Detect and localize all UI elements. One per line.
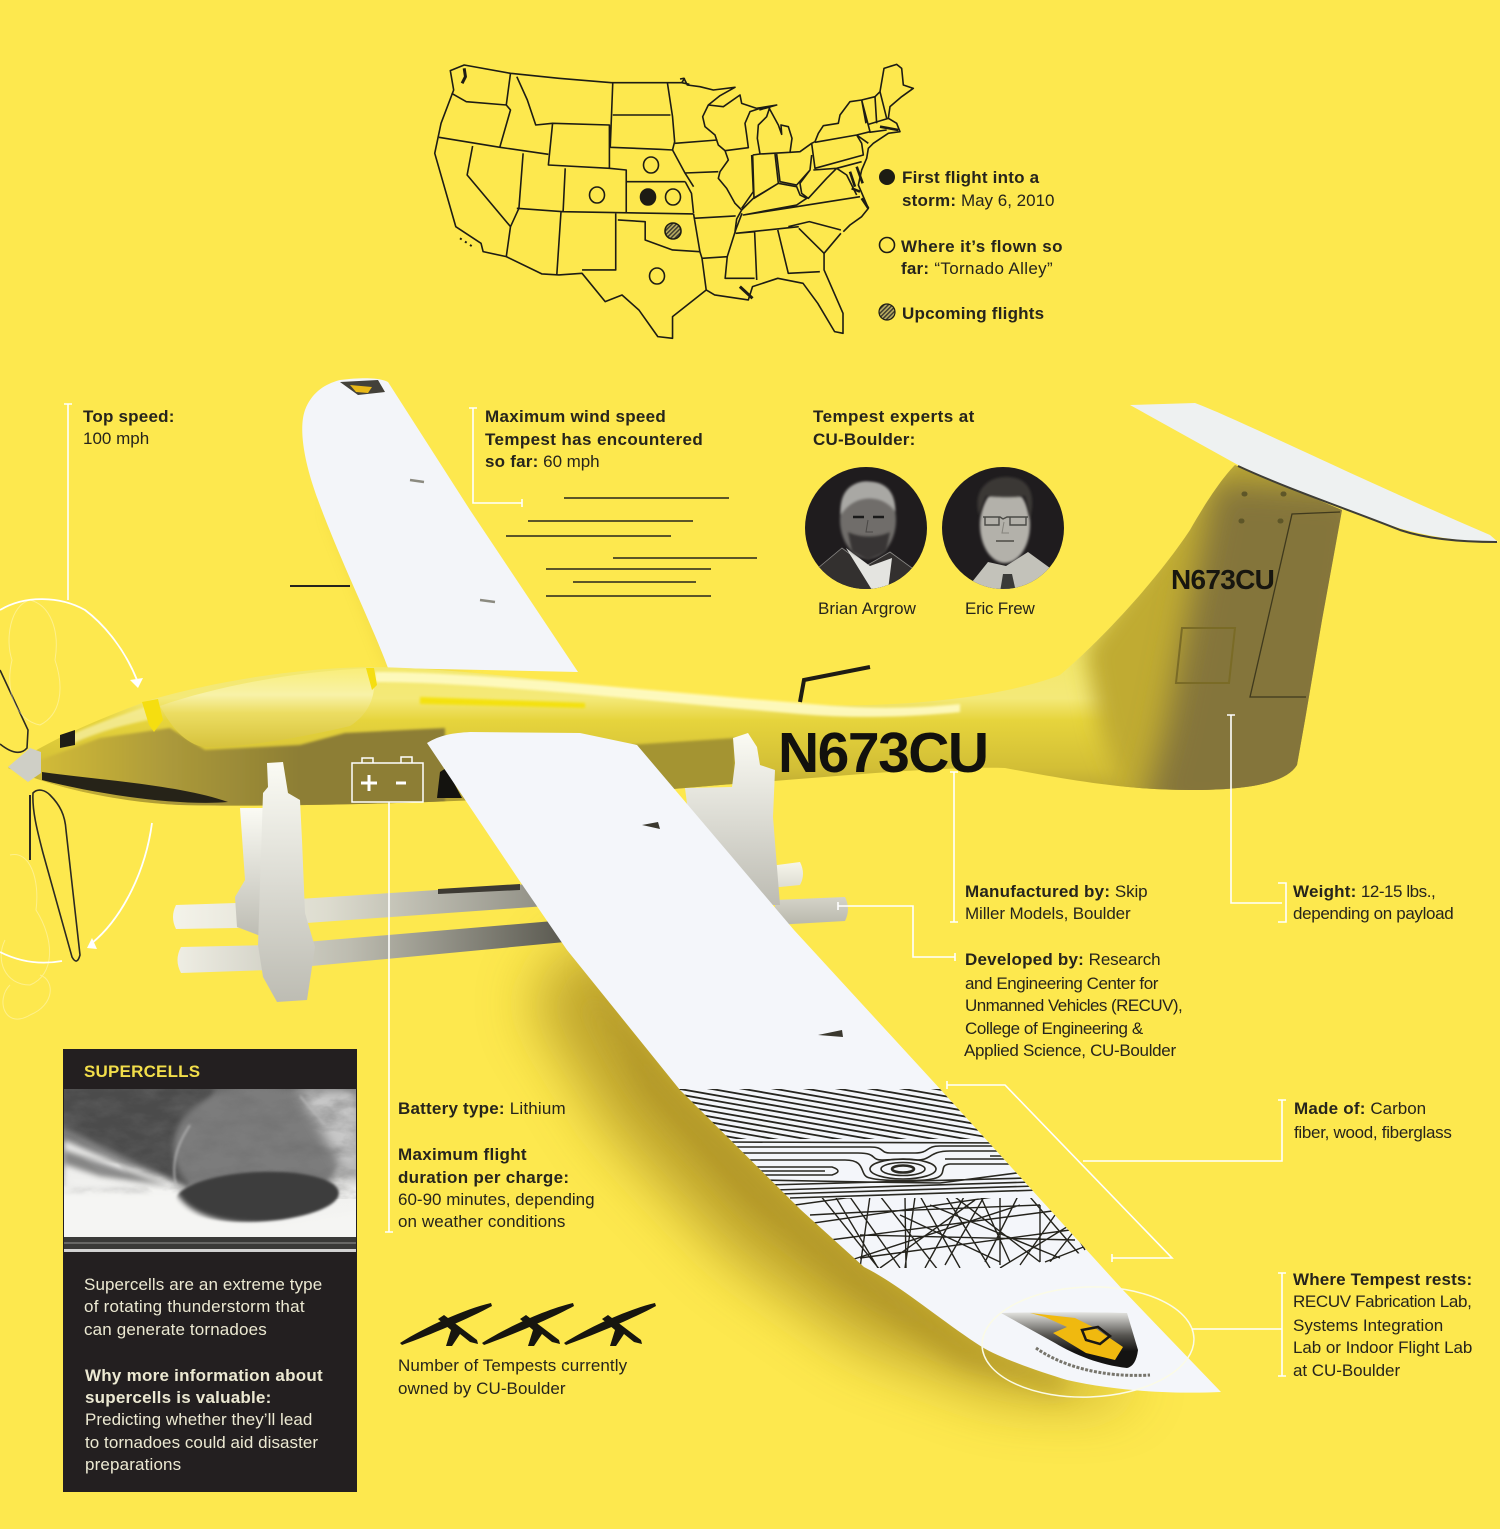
supercell photo bbox=[60, 1085, 360, 1252]
wing hinge marks bbox=[642, 822, 843, 1037]
callout: developed by: Applied Science, CU-Boulder bbox=[964, 1041, 1176, 1060]
wood grain bbox=[725, 1142, 1040, 1198]
wing shadows bbox=[330, 500, 1140, 1400]
supercells description: preparations bbox=[85, 1455, 181, 1474]
callout: developed by: College of Engineering & bbox=[965, 1019, 1144, 1038]
portrait: Eric Frew bbox=[942, 467, 1064, 600]
experts heading: Tempest experts at bbox=[813, 407, 975, 426]
propeller bbox=[0, 670, 80, 961]
callout: manufactured by: Manufactured by: Skip bbox=[965, 882, 1148, 901]
map of the United States bbox=[435, 64, 913, 338]
expert names: Brian Argrow bbox=[818, 599, 917, 618]
fin body colour bbox=[1076, 465, 1342, 790]
callout: top speed: 100 mph bbox=[83, 429, 149, 448]
callout: weight: depending on payload bbox=[1293, 904, 1453, 923]
expert names: Eric Frew bbox=[965, 599, 1036, 618]
nose highlight bbox=[70, 705, 158, 745]
callout: battery: Battery type: Lithium bbox=[398, 1099, 566, 1118]
support rods bbox=[173, 862, 848, 973]
callout: where Tempest rests: Systems Integration bbox=[1293, 1316, 1443, 1335]
supercells description: supercells is valuable: bbox=[85, 1388, 271, 1407]
wing material patterns bbox=[679, 1089, 1086, 1268]
battery icon bbox=[352, 757, 423, 802]
supercells description: Supercells are an extreme type bbox=[84, 1275, 322, 1294]
fiberglass crosshatch bbox=[795, 1195, 1086, 1270]
near wing bbox=[427, 732, 1221, 1393]
callout: where Tempest rests: RECUV Fabrication Lab, bbox=[1293, 1292, 1471, 1311]
callout: manufactured by bbox=[965, 882, 1148, 923]
callout: manufactured by: Miller Models, Boulder bbox=[965, 904, 1131, 923]
supercells description: Why more information about bbox=[85, 1366, 323, 1385]
callout: weight: Weight: 12-15 lbs., bbox=[1293, 882, 1435, 901]
callout lines bbox=[64, 404, 1286, 1376]
supercells description: can generate tornadoes bbox=[84, 1320, 267, 1339]
callout: maximum wind speed: so far: 60 mph bbox=[485, 452, 600, 471]
propeller rotation arcs bbox=[0, 599, 152, 1019]
fuselage registration: N673CU bbox=[778, 721, 988, 785]
callout: top speed: Top speed: bbox=[83, 407, 175, 426]
map legend bbox=[879, 168, 1063, 323]
callout: top speed bbox=[83, 407, 175, 448]
supercells description: to tornadoes could aid disaster bbox=[85, 1433, 318, 1452]
supercells description: Predicting whether they’ll lead bbox=[85, 1410, 312, 1429]
callout: made of bbox=[1294, 1099, 1452, 1142]
vivid stripe bbox=[420, 697, 585, 708]
fuselage highlight bbox=[375, 672, 960, 717]
nose details bbox=[8, 730, 228, 803]
black wind lines bbox=[290, 498, 757, 596]
far wing bbox=[302, 378, 578, 672]
number of Tempests caption: Number of Tempests currently bbox=[398, 1356, 628, 1375]
callout: maximum wind speed: Tempest has encountered bbox=[485, 430, 703, 449]
fuselage and tail fin bbox=[8, 465, 1342, 806]
callout: battery: duration per charge: bbox=[398, 1168, 569, 1187]
map legend: Where it’s flown so bbox=[901, 237, 1063, 256]
map legend: far: “Tornado Alley” bbox=[901, 259, 1053, 278]
logo highlight ellipse bbox=[980, 1283, 1196, 1401]
carbon fiber stripes bbox=[679, 1089, 984, 1139]
lower forward belly bbox=[40, 728, 445, 806]
number of Tempests caption bbox=[398, 1356, 628, 1398]
callout: battery: on weather conditions bbox=[398, 1212, 566, 1231]
antenna bbox=[800, 667, 870, 702]
number of Tempests caption: owned by CU-Boulder bbox=[398, 1379, 566, 1398]
experts heading bbox=[813, 407, 975, 449]
canopy bbox=[160, 668, 374, 747]
expert names bbox=[818, 599, 1036, 618]
supercells description: of rotating thunderstorm that bbox=[84, 1297, 305, 1316]
experts heading: CU-Boulder: bbox=[813, 430, 916, 449]
callout: developed by bbox=[964, 950, 1182, 1060]
map legend: First flight into a bbox=[902, 168, 1040, 187]
callout: battery bbox=[398, 1099, 595, 1231]
callout: battery: 60-90 minutes, depending bbox=[398, 1190, 595, 1209]
callout: developed by: Unmanned Vehicles (RECUV), bbox=[965, 996, 1182, 1015]
callout: where Tempest rests: Where Tempest rests: bbox=[1293, 1270, 1472, 1289]
callout: weight bbox=[1293, 882, 1453, 923]
callout: developed by: and Engineering Center for bbox=[965, 974, 1159, 993]
callout: made of: Made of: Carbon bbox=[1294, 1099, 1426, 1118]
tape marks bbox=[142, 668, 377, 732]
rear fin details bbox=[1176, 494, 1340, 697]
callout: developed by: Developed by: Research bbox=[965, 950, 1160, 969]
wing tip logo bbox=[1001, 1312, 1150, 1375]
front foam stand bbox=[235, 762, 315, 1002]
rear foam stand bbox=[685, 733, 780, 905]
map legend: Upcoming flights bbox=[902, 304, 1044, 323]
black wing root window bbox=[437, 768, 462, 798]
callout: where Tempest rests: Lab or Indoor Flight Lab bbox=[1293, 1338, 1472, 1357]
callout: where Tempest rests bbox=[1293, 1270, 1472, 1380]
horizontal stabilizer bbox=[1130, 403, 1498, 542]
callout: where Tempest rests: at CU-Boulder bbox=[1293, 1361, 1400, 1380]
portrait: Brian Argrow bbox=[805, 467, 927, 600]
callout: maximum wind speed: Maximum wind speed bbox=[485, 407, 666, 426]
callout: maximum wind speed bbox=[485, 407, 703, 471]
callout: made of: fiber, wood, fiberglass bbox=[1294, 1123, 1452, 1142]
map dots bbox=[590, 157, 681, 284]
wing shadow on fuselage bbox=[630, 738, 735, 794]
panel: supercells bbox=[60, 1049, 360, 1492]
supercells description bbox=[84, 1275, 323, 1474]
icons: three planes bbox=[400, 1303, 656, 1346]
fin registration: N673CU bbox=[1171, 564, 1274, 595]
map legend: storm: May 6, 2010 bbox=[902, 191, 1054, 210]
aircraft bbox=[0, 378, 1498, 1401]
callout: battery: Maximum flight bbox=[398, 1145, 527, 1164]
supercells heading: SUPERCELLS bbox=[84, 1062, 200, 1081]
